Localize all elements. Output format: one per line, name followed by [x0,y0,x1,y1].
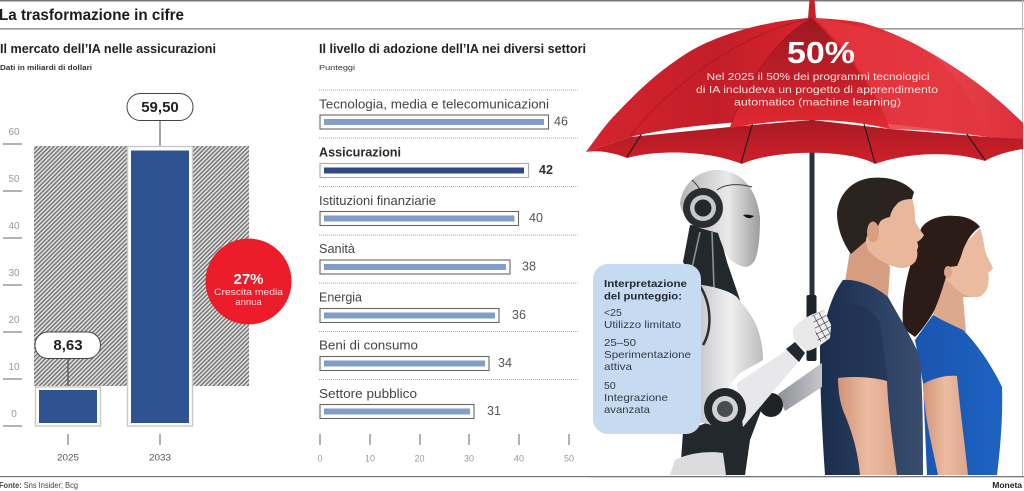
illustration: umbrella [586,0,1023,361]
umbrella centre panel [730,18,890,129]
x axis [317,434,574,464]
title: La trasformazione in cifre [0,7,184,24]
robot neck [683,225,740,300]
heading: mercato: Il mercato dell’IA nelle assicurazioni [0,42,216,56]
illustration: man [820,178,924,475]
row: tecnologia: Tecnologia, media e telecomunicazioni [319,98,549,112]
callout 59,50 [127,94,193,146]
y axis: 10 [8,362,20,373]
growth badge: Crescita media [214,287,284,298]
row: tecnologia [319,98,568,129]
illustration: robot [670,170,822,475]
umbrella shaft [810,115,814,300]
umbrella ribs [627,122,985,163]
callout 59,50: 59,50 [141,99,179,116]
robot head [680,170,760,267]
row: assicurazioni [319,146,553,178]
robot knuckles [812,310,831,343]
bar 2025 [36,387,100,426]
brand: Moneta [992,480,1022,490]
umbrella right panel [814,18,988,137]
legend: interpretazione del punteggio: Sperimentazione [604,349,691,361]
robot lower body [680,400,765,475]
text: 50%: 50% [787,35,855,70]
y axis: 0 [11,409,17,420]
legend: interpretazione del punteggio: avanzata [604,404,650,416]
illustration: woman [903,216,1002,475]
hatched background [34,146,249,386]
row: energia: 36 [512,308,526,322]
row: beni di consumo: 34 [498,356,512,370]
separators [319,90,578,380]
legend: interpretazione del punteggio: <25 [604,307,622,319]
legend: interpretazione del punteggio: 50 [604,380,616,392]
x axis [57,434,171,464]
row: istituzioni finanziarie [319,194,543,226]
row: assicurazioni: 42 [539,163,553,177]
x axis: 50 [564,454,574,464]
row: istituzioni finanziarie: Istituzioni finanziarie [319,194,436,208]
y axis: 20 [8,315,20,326]
growth badge [206,238,292,324]
x axis: 2025 [57,452,79,464]
umbrella tip [808,0,816,18]
umbrella grip [806,295,816,361]
row: settore pubblico [319,387,501,418]
legend: interpretazione del punteggio [593,264,701,434]
y axis: 60 [8,127,20,138]
text: machine learning: di IA includeva un progetto di apprendimento [696,84,938,96]
row: istituzioni finanziarie: 40 [529,211,543,225]
subheading: unita: Dati in miliardi di dollari [0,63,92,72]
y axis: 50 [8,174,20,185]
row: tecnologia: 46 [554,114,568,128]
umbrella underside [586,120,1023,164]
row: assicurazioni: Assicurazioni [319,146,401,160]
x axis: 30 [464,454,474,464]
y axis [3,127,22,426]
legend: interpretazione del punteggio: del punteggio: [604,290,682,302]
row: settore pubblico: 31 [487,404,501,418]
umbrella seams [630,18,812,137]
panel: mercato IA assicurazioni [0,42,292,464]
robot hand [793,310,831,351]
row: energia [319,290,526,322]
growth badge: 27% [233,271,264,288]
legend: interpretazione del punteggio: Integrazione [604,392,668,404]
y axis: 30 [8,268,20,279]
growth badge: annua [235,297,262,308]
x axis: 10 [365,454,375,464]
robot torso [690,284,763,425]
row: settore pubblico: Settore pubblico [319,387,417,401]
text: machine learning [696,71,938,108]
heading: adozione: Il livello di adozione dell’IA nei diversi settori [319,42,586,56]
robot rear arm [778,363,822,411]
x axis: 2033 [149,452,171,464]
row: beni di consumo: Beni di consumo [319,338,418,352]
umbrella canopy [586,18,1023,152]
row: energia: Energia [319,290,362,304]
legend: interpretazione del punteggio: Interpretazione [604,278,687,290]
legend: interpretazione del punteggio: Utilizzo limitato [604,319,681,331]
callout 8,63 [35,332,100,386]
subheading: punteggi: Punteggi [319,63,355,72]
x axis: 20 [414,454,425,464]
text: machine learning: Nel 2025 il 50% dei programmi tecnologici [706,71,930,83]
legend: interpretazione del punteggio: 25–50 [604,337,636,349]
text: machine learning: automatico (machine learning) [734,96,901,108]
y axis: 40 [8,221,20,232]
x axis: 0 [317,454,323,464]
row: beni di consumo [319,338,512,370]
legend: interpretazione del punteggio: attiva [604,361,632,373]
row: sanita [319,242,536,274]
robot forearm [737,350,800,427]
x axis: 40 [514,454,524,464]
callout 8,63: 8,63 [53,337,83,354]
bar 2033 [128,146,192,426]
panel: adozione IA nei settori [317,42,586,464]
source: Fonte: Sns Insider; Bcg [0,481,78,490]
row: sanita: Sanità [319,242,355,256]
row: sanita: 38 [522,260,536,274]
